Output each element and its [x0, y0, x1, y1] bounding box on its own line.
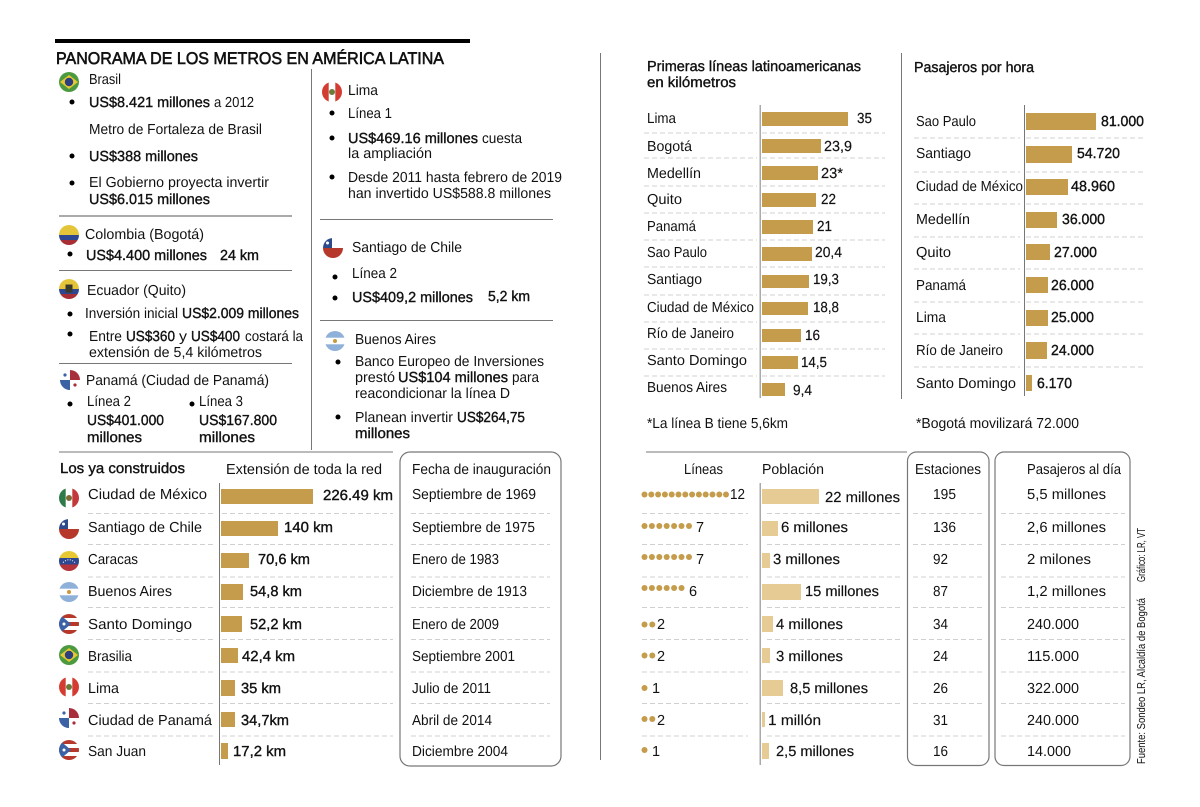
row: San Juan: [58, 739, 146, 761]
block: Santiago de Chile: Línea 2: [352, 266, 397, 282]
bar chart: Población: 2,5 millones: [776, 744, 854, 760]
bar chart: Primeras líneas latinoamericanas en kilómetros: 20,4: [815, 245, 842, 261]
panel: Fecha de inauguración: Enero de 1983: [412, 552, 499, 568]
panel: Pasajeros al día: 1,2 millones: [1027, 584, 1106, 600]
bar chart: Primeras líneas latinoamericanas en kilómetros: Panamá: [647, 219, 697, 235]
block: Lima: han invertido US$588.8 millones: [348, 186, 551, 202]
panel: Líneas dot chart: 2: [657, 617, 665, 633]
bar chart: Población: 22 millones: [825, 490, 900, 506]
bar chart: Primeras líneas latinoamericanas en kilómetros: 18,8: [813, 300, 839, 316]
bar chart: Primeras líneas latinoamericanas en kilómetros: 16: [805, 328, 820, 344]
block: Buenos Aires: prestó: [355, 370, 395, 386]
block: Lima: la ampliación: [348, 146, 432, 162]
bar chart: Pasajeros por hora: 6.170: [1037, 376, 1072, 392]
block: Brasil: El Gobierno proyecta invertir: [89, 175, 269, 191]
panel: Fecha de inauguración: Abril de 2014: [412, 713, 492, 729]
dots row 6: [642, 585, 684, 591]
bar chart: Pasajeros por hora: 27.000: [1054, 245, 1097, 261]
panel: Pasajeros al día: 14.000: [1027, 744, 1071, 760]
block: Panamá: Panamá (Ciudad de Panamá): [86, 373, 269, 389]
heading: Primeras líneas: Primeras líneas latinoamericanas: [647, 59, 861, 75]
block: Buenos Aires: para: [512, 370, 540, 386]
bar chart: Primeras líneas latinoamericanas en kilómetros: Río de Janeiro: [647, 326, 734, 342]
bar chart: Primeras líneas latinoamericanas en kilómetros: Medellín: [647, 166, 701, 182]
footnote: Bogotá: *Bogotá movilizará 72.000: [916, 416, 1079, 432]
panel: Líneas dot chart: 1: [652, 744, 660, 760]
bar chart: Primeras líneas latinoamericanas en kilómetros: Ciudad de México: [647, 300, 754, 316]
dots row 2: [642, 622, 655, 628]
panel: Estaciones: 92: [933, 552, 948, 568]
row: Brasilia: [59, 645, 133, 665]
bar chart: Extensión de toda la red: 140 km: [284, 520, 333, 536]
bar chart: Primeras líneas latinoamericanas en kilómetros: 9,4: [793, 383, 812, 399]
panel: country investments middle column: [320, 82, 562, 442]
block: Lima: US$469.16 millones: [348, 131, 478, 147]
block: Lima: cuesta: [482, 131, 523, 147]
block: Lima: Desde 2011 hasta febrero de 2019: [348, 170, 562, 186]
bar chart: Población: 6 millones: [781, 520, 848, 536]
panel: Estaciones: 136: [933, 520, 956, 536]
bar chart: Extensión de toda la red: 54,8 km: [250, 584, 302, 600]
bar chart: Población: 3 millones: [776, 649, 843, 665]
block: Buenos Aires: Buenos Aires: [355, 332, 436, 348]
title: PANORAMA DE LOS METROS EN AMÉRICA LATINA: [56, 49, 445, 68]
panel: Fecha de inauguración: Diciembre 2004: [412, 744, 508, 760]
block: Buenos Aires: US$104 millones: [398, 370, 508, 386]
block: Panamá: millones: [87, 430, 142, 446]
bar chart: Población: 3 millones: [773, 552, 840, 568]
panel: Pasajeros al día: 240.000: [1027, 713, 1079, 729]
row: Lima: [59, 677, 120, 697]
block: Santiago de Chile: Santiago de Chile: [352, 240, 462, 256]
panel: Estaciones: Estaciones: [915, 462, 981, 478]
panel: Pasajeros al día: 2 milones: [1027, 552, 1091, 568]
block: Lima: [322, 82, 562, 202]
bar chart: Primeras líneas latinoamericanas en kilómetros: Sao Paulo: [647, 245, 707, 261]
panel: Líneas dot chart: [642, 462, 748, 760]
dots row 7 second: [642, 554, 692, 560]
panel: Fecha de inauguración: Septiembre de 1969: [412, 487, 536, 503]
panel: Fecha de inauguración: Enero de 2009: [412, 617, 499, 633]
top rule: [55, 39, 470, 43]
row: Ciudad de México: Ciudad de México: [88, 487, 207, 503]
heading: Los ya construidos: Los ya construidos: [60, 461, 185, 477]
bar chart: Población: 8,5 millones: [790, 681, 868, 697]
panel: Líneas dot chart: Líneas: [684, 462, 723, 478]
bar chart: Primeras líneas latinoamericanas en kilómetros: Buenos Aires: [647, 380, 727, 396]
bar chart: Pasajeros por hora: 81.000: [1101, 114, 1144, 130]
block: Panamá: [60, 370, 277, 446]
block: Ecuador: US$360: [126, 329, 175, 345]
panel: Líneas dot chart: 2: [657, 713, 665, 729]
bar chart: Primeras líneas latinoamericanas en kilómetros: 35: [857, 111, 872, 127]
block: Ecuador: y: [179, 329, 188, 345]
dot row 1: [642, 685, 648, 691]
block: Ecuador: US$400: [191, 329, 240, 345]
bar chart: Extensión de toda la red: 226.49 km: [323, 488, 393, 504]
bar chart: Pasajeros por hora: Panamá: [916, 278, 967, 294]
bar chart: Pasajeros por hora: [914, 60, 1144, 396]
block: Buenos Aires: Planean invertir: [355, 410, 453, 426]
row: Ciudad de Panamá: Ciudad de Panamá: [88, 713, 213, 729]
panel: Pasajeros al día: 322.000: [1027, 681, 1079, 697]
panel: Estaciones: 24: [933, 649, 948, 665]
bar chart: Extensión de toda la red: 52,2 km: [250, 617, 302, 633]
block: Santiago de Chile: US$409,2 millones: [352, 290, 473, 306]
bar chart: Población: Población: [762, 462, 824, 478]
dots row 12: [642, 492, 729, 498]
block: Brasil: Brasil: [89, 72, 121, 88]
bar chart: Primeras líneas latinoamericanas en kilómetros: 23,9: [824, 139, 852, 155]
panel: Fecha de inauguración: [400, 452, 561, 766]
panel: Fecha de inauguración: Septiembre de 1975: [412, 520, 535, 536]
block: Buenos Aires: millones: [355, 426, 410, 442]
bar chart: Extensión de toda la red: 70,6 km: [258, 552, 310, 568]
block: Panamá: millones: [199, 430, 255, 446]
bar chart: Primeras líneas latinoamericanas en kilómetros: 21: [817, 219, 832, 235]
row: Santiago de Chile: [59, 519, 202, 539]
block: Panamá: Línea 2: [87, 394, 131, 410]
panel: Líneas dot chart: 7: [696, 552, 704, 568]
panel: Estaciones: 31: [933, 713, 948, 729]
dots row 2 second: [642, 652, 655, 658]
block: Ecuador: Entre: [89, 329, 122, 345]
source credit: Gráfico: LR, VT: [1136, 528, 1148, 582]
panel: Estaciones: 16: [933, 744, 948, 760]
row: Ciudad de México: [59, 487, 207, 508]
block: Buenos Aires: US$264,75: [457, 410, 525, 426]
bar chart: Primeras líneas latinoamericanas en kilómetros: Lima: [647, 111, 677, 127]
heading: Pasajeros por hora: Pasajeros por hora: [914, 60, 1035, 76]
bar chart: Primeras líneas latinoamericanas en kilómetros: 14,5: [801, 355, 827, 371]
panel: Líneas dot chart: 7: [696, 520, 704, 536]
panel: Pasajeros al día: Pasajeros al día: [1027, 462, 1122, 478]
bar chart: Pasajeros por hora: Santiago: [916, 146, 971, 162]
panel: Pasajeros al día: [995, 452, 1130, 766]
bar chart: Primeras líneas latinoamericanas en kilómetros: 19,3: [813, 272, 839, 288]
panel: Pasajeros al día: 2,6 millones: [1027, 520, 1106, 536]
row: San Juan: San Juan: [88, 744, 146, 760]
panel: Estaciones: [908, 452, 989, 766]
heading: Primeras líneas: [647, 59, 861, 91]
footnote: línea B: *La línea B tiene 5,6km: [647, 416, 788, 432]
bar chart: Pasajeros por hora: 26.000: [1051, 278, 1094, 294]
panel: Líneas dot chart: 12: [730, 487, 745, 503]
block: Colombia: Colombia (Bogotá): [85, 227, 204, 243]
panel: Fecha de inauguración: Fecha de inauguración: [412, 462, 551, 478]
block: Colombia: 24 km: [220, 248, 259, 264]
bar chart: Extensión de toda la red: 34,7km: [241, 713, 289, 729]
bar chart: Primeras líneas latinoamericanas en kilómetros: Quito: [647, 192, 682, 208]
bar chart: Primeras líneas latinoamericanas en kilómetros: 22: [821, 192, 836, 208]
block: Panamá: US$401.000: [87, 413, 164, 429]
bar chart: Pasajeros por hora: Lima: [916, 310, 947, 326]
panel: Líneas dot chart: 2: [657, 649, 665, 665]
bar chart: Primeras líneas latinoamericanas en kilómetros: 23*: [821, 166, 843, 182]
block: Brasil: [59, 72, 269, 208]
bar chart: Población: 4 millones: [776, 617, 843, 633]
bar chart: Pasajeros por hora: 54.720: [1077, 146, 1120, 162]
dot row 1 second: [642, 747, 648, 753]
bar chart: Población: 1 millón: [768, 713, 821, 729]
bar chart: Extensión de toda la red: 35 km: [241, 681, 281, 697]
block: Brasil: a 2012: [214, 95, 254, 111]
bar chart: Pasajeros por hora: 25.000: [1051, 310, 1094, 326]
block: Ecuador: US$2.009 millones: [182, 306, 299, 322]
panel: Líneas dot chart: 1: [652, 681, 660, 697]
block: Santiago de Chile: 5,2 km: [488, 289, 530, 305]
bar chart: Extensión de toda la red: [219, 462, 393, 765]
bar chart: Primeras líneas latinoamericanas en kilómetros: [644, 59, 885, 399]
panel: Pasajeros al día: 240.000: [1027, 617, 1079, 633]
panel: Los ya construidos, city list: [58, 461, 213, 761]
block: Brasil: US$8.421 millones: [89, 95, 210, 111]
bar chart: Pasajeros por hora: Santo Domingo: [916, 376, 1016, 392]
block: Brasil: US$6.015 millones: [89, 192, 210, 208]
block: Lima: Lima: [348, 83, 379, 99]
bar chart: Población: 15 millones: [805, 584, 879, 600]
bar chart: Población: [760, 462, 901, 765]
panel: Estaciones: 26: [933, 681, 948, 697]
bar chart: Pasajeros por hora: 24.000: [1051, 343, 1094, 359]
heading: Primeras líneas: en kilómetros: [647, 75, 736, 91]
bar chart: Pasajeros por hora: Medellín: [916, 212, 970, 228]
row: Buenos Aires: [59, 582, 172, 602]
row: Lima: Lima: [88, 681, 120, 697]
block: Panamá: US$167.800: [199, 413, 277, 429]
block: Buenos Aires: Banco Europeo de Inversiones: [355, 354, 544, 370]
row: Caracas: [59, 551, 138, 571]
block: Brasil: US$388 millones: [89, 149, 198, 165]
panel: country investments left column: [59, 72, 304, 446]
block: Buenos Aires: [325, 331, 544, 442]
panel: Fecha de inauguración: Diciembre de 1913: [412, 584, 527, 600]
block: Ecuador: Ecuador (Quito): [87, 283, 186, 299]
block: Brasil: Metro de Fortaleza de Brasil: [89, 122, 262, 138]
block: Colombia: US$4.400 millones: [86, 248, 207, 264]
block: Santiago de Chile: [323, 238, 530, 306]
row: Santo Domingo: [58, 613, 192, 635]
row: Buenos Aires: Buenos Aires: [88, 584, 172, 600]
panel: Fecha de inauguración: Septiembre 2001: [412, 649, 515, 665]
bar chart: Pasajeros por hora: 48.960: [1071, 179, 1115, 195]
bar chart: Primeras líneas latinoamericanas en kilómetros: Santo Domingo: [647, 353, 747, 369]
dots row 2 third: [642, 716, 655, 722]
block: Lima: Línea 1: [348, 106, 392, 122]
panel: Fecha de inauguración: Julio de 2011: [412, 681, 491, 697]
row: Santiago de Chile: Santiago de Chile: [88, 520, 202, 536]
row: Brasilia: Brasilia: [88, 649, 133, 665]
bar chart: Pasajeros por hora: Río de Janeiro: [916, 343, 1003, 359]
panel: Estaciones: 87: [933, 584, 948, 600]
bar chart: Pasajeros por hora: Ciudad de México: [916, 179, 1023, 195]
bar chart: Extensión de toda la red: 42,4 km: [242, 649, 295, 665]
bar chart: Primeras líneas latinoamericanas en kilómetros: Santiago: [647, 272, 702, 288]
bar chart: Pasajeros por hora: Sao Paulo: [916, 114, 976, 130]
bar chart: Extensión de toda la red: Extensión de toda la red: [226, 462, 382, 478]
row: Santo Domingo: Santo Domingo: [88, 617, 192, 633]
block: Colombia: [59, 225, 259, 264]
block: Ecuador: Inversión inicial: [85, 306, 178, 322]
block: Ecuador: extensión de 5,4 kilómetros: [89, 345, 262, 361]
panel: Pasajeros al día: 115.000: [1027, 649, 1079, 665]
block: Ecuador: costará la: [245, 329, 304, 345]
bar chart: Extensión de toda la red: 17,2 km: [233, 744, 286, 760]
dots row 7: [642, 523, 692, 529]
block: Buenos Aires: reacondicionar la línea D: [355, 386, 510, 402]
block: Ecuador: [59, 279, 304, 361]
panel: Líneas dot chart: 6: [689, 584, 697, 600]
panel: Pasajeros al día: 5,5 millones: [1027, 487, 1106, 503]
block: Panamá: Línea 3: [199, 394, 243, 410]
panel: Estaciones: 195: [933, 487, 956, 503]
bar chart: Pasajeros por hora: 36.000: [1062, 212, 1105, 228]
panel: Estaciones: 34: [933, 617, 948, 633]
row: Caracas: Caracas: [88, 552, 138, 568]
row: Ciudad de Panamá: [59, 708, 213, 729]
bar chart: Primeras líneas latinoamericanas en kilómetros: Bogotá: [647, 139, 693, 155]
source credit: Fuente: Sondeo LR, Alcaldía de Bogotá: [1136, 598, 1148, 764]
bar chart: Pasajeros por hora: Quito: [916, 245, 951, 261]
